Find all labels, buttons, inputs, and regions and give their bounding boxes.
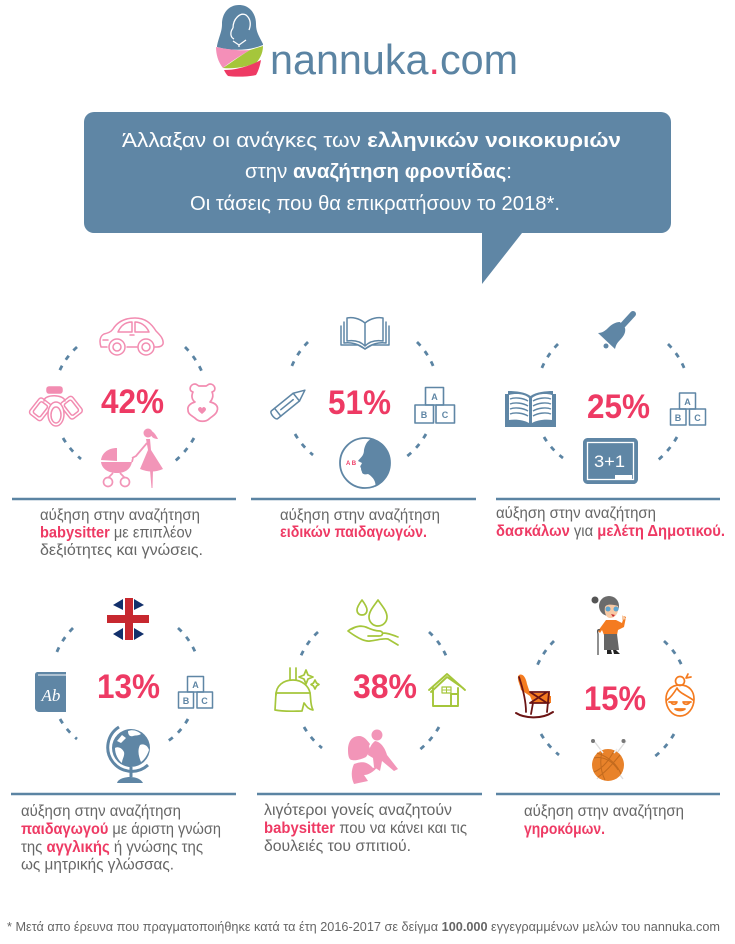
icon: rocking chair (516, 675, 553, 717)
footnote: * Μετά απο έρευνα που πραγματοποιήθηκε κατά τα έτη 2016-2017 σε δείγμα 100.000 εγγεγραμμένων μελών του nannuka.com (7, 920, 720, 934)
description (40, 507, 203, 559)
description: δεξιότητες και γνώσεις. (40, 542, 203, 559)
description: ως μητρικής γλώσσας. (21, 856, 174, 874)
icon: baby booties (28, 387, 83, 426)
percentage: 25% (587, 388, 650, 426)
icon: ABC blocks: C (694, 413, 701, 423)
description: δουλειές του σπιτιού. (264, 838, 411, 855)
icon: ABC blocks: B (421, 410, 428, 420)
description: αύξηση στην αναζήτηση (524, 803, 684, 820)
description: γηροκόμων. (524, 821, 605, 838)
panel: 15% elderly carers (496, 596, 720, 838)
description (524, 803, 684, 838)
icon: speaking head: A B (346, 461, 357, 467)
icon: hand bell (598, 314, 633, 349)
icon: ABC blocks: B (183, 696, 190, 706)
percentage: 15% (584, 680, 646, 718)
panel: 51% special educators (251, 318, 476, 541)
percentage: 42% (101, 383, 164, 421)
description: ειδικών παιδαγωγών. (280, 524, 427, 541)
icon: open book (341, 318, 389, 349)
dashed ring (291, 342, 434, 457)
icon: mother lifting baby (348, 730, 398, 784)
description: αύξηση στην αναζήτηση (21, 803, 181, 820)
title line 2: στην αναζήτηση φροντίδας: (245, 160, 512, 183)
dashed ring (59, 347, 202, 462)
panel: 38% fewer housework babysitters (257, 600, 482, 855)
description (264, 802, 467, 855)
title line 1: Άλλαξαν οι ανάγκες των ελληνικών νοικοκυριών (122, 129, 621, 152)
icon: blackboard: 3+1 (594, 452, 625, 471)
description: babysitter με επιπλέον (40, 524, 192, 542)
description: παιδαγωγού με άριστη γνώση (21, 821, 221, 838)
description: της αγγλικής ή γνώσης της (21, 839, 203, 856)
description (21, 803, 221, 874)
speech bubble heading (84, 112, 671, 284)
icon: toy car (100, 318, 163, 355)
icon: UK flag (107, 598, 149, 640)
description (496, 505, 725, 540)
icon: globe (108, 727, 150, 783)
icon: ABC blocks (415, 388, 454, 423)
icon: teddy bear (188, 384, 218, 421)
icon: ABC blocks: C (201, 696, 208, 706)
icon: ABC blocks: A (431, 392, 438, 402)
dashed ring (537, 641, 682, 757)
icon: Ab book: Ab (41, 686, 60, 705)
description: αύξηση στην αναζήτηση (280, 507, 440, 524)
icon: Ab book (35, 672, 66, 712)
icon: hand with water drops (348, 600, 398, 645)
icon: open book solid (505, 391, 556, 427)
icon: pencil (270, 386, 308, 420)
percentage: 38% (353, 668, 417, 706)
description: λιγότεροι γονείς αναζητούν (264, 802, 452, 819)
icon: ABC blocks: B (675, 413, 682, 423)
description: αύξηση στην αναζήτηση (40, 507, 200, 524)
icon: ABC blocks: A (684, 397, 691, 407)
panel: 42% babysitter (12, 318, 236, 559)
icon: house (429, 674, 465, 706)
title line 3: Οι τάσεις που θα επικρατήσουν το 2018*. (190, 192, 560, 215)
icon: grandmother (592, 596, 626, 655)
description (280, 507, 440, 541)
icon: mother with stroller (101, 428, 163, 488)
icon: broom (275, 668, 319, 711)
description: babysitter που να κάνει και τις (264, 820, 467, 837)
icon: ABC blocks (178, 676, 212, 708)
percentage: 51% (328, 384, 391, 422)
description: αύξηση στην αναζήτηση (496, 505, 656, 522)
logo: nannuka.com (216, 5, 518, 83)
icon: ABC blocks: A (192, 680, 199, 690)
logo wordmark: nannuka.com (270, 36, 518, 83)
icon: yarn ball with needles (591, 739, 626, 781)
description: δασκάλων για μελέτη Δημοτικού. (496, 523, 725, 540)
icon: speaking head (340, 438, 390, 488)
panel: 25% primary teachers (496, 314, 725, 540)
dashed ring (300, 632, 447, 751)
dashed ring (541, 344, 685, 461)
panel: 13% English tutors (11, 598, 236, 874)
dashed ring (56, 628, 196, 741)
icon: ABC blocks (670, 393, 706, 425)
icon: blackboard (584, 440, 636, 482)
icon: matryoshka doll (216, 5, 263, 77)
icon: grandmother face (666, 674, 694, 716)
percentage: 13% (97, 668, 160, 706)
icon: ABC blocks: C (442, 410, 449, 420)
